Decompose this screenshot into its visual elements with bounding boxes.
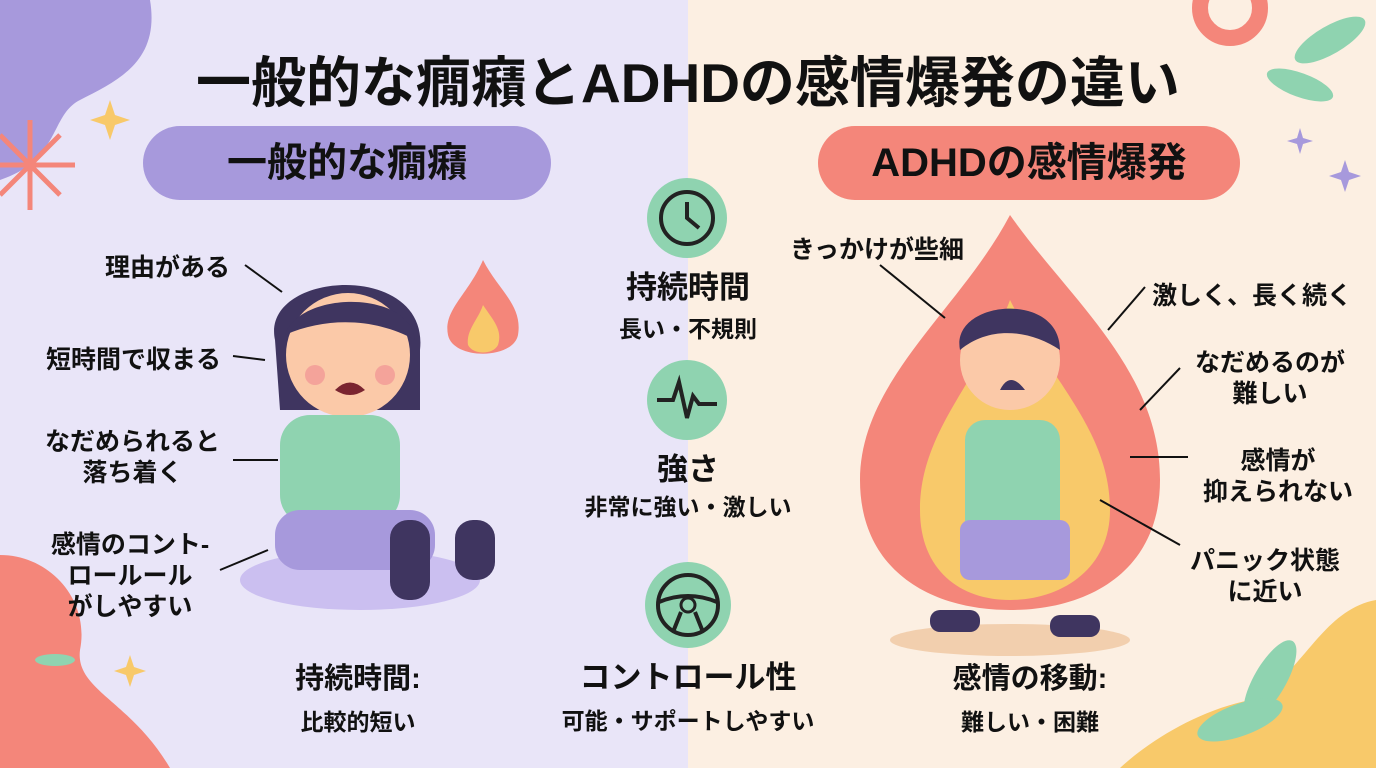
metric: controllability: コントロール性 <box>580 660 796 695</box>
text: 短時間で収まる <box>46 346 221 374</box>
text: 感情のコント- <box>51 531 209 559</box>
footer left: 比較的短い <box>300 709 416 735</box>
illustration: boy in flames <box>860 215 1160 656</box>
footer right <box>953 662 1107 735</box>
text: きっかけが些細 <box>790 236 964 264</box>
text: 長い・不規則 <box>619 316 757 342</box>
text: なだめるのが <box>1195 349 1345 377</box>
text: がしやすい <box>68 593 192 621</box>
footer right: 難しい・困難 <box>961 709 1099 735</box>
labels: general tantrum <box>45 254 230 621</box>
text: 落ち着く <box>82 459 182 487</box>
text: 抑えられない <box>1203 478 1353 506</box>
illustration: crying girl <box>240 285 495 610</box>
text: 非常に強い・激しい <box>584 494 792 520</box>
text: ロールール <box>67 562 192 590</box>
icon: pulse <box>647 360 727 440</box>
header pill: general tantrum <box>143 126 551 200</box>
text: 可能・サポートしやすい <box>562 708 814 734</box>
labels: ADHD outburst <box>649 236 1353 637</box>
icon: clock <box>647 178 727 258</box>
footer left <box>295 663 421 735</box>
footer left: 持続時間: <box>295 663 421 695</box>
title: 一般的な癇癪とADHDの感情爆発の違い <box>196 52 1180 114</box>
text: 理由がある <box>105 254 230 282</box>
header pill: ADHD outburst <box>818 126 1240 200</box>
text: 感情が <box>1240 447 1316 475</box>
text: 難しい <box>1232 380 1308 408</box>
text: なだめられると <box>45 428 220 456</box>
header pill: general tantrum: 一般的な癇癪 <box>227 141 467 185</box>
text: パニック状態 <box>1190 547 1340 575</box>
footer right: 感情の移動: <box>953 663 1107 695</box>
icon: small flame <box>447 260 519 354</box>
metric: intensity: 強さ <box>657 452 719 487</box>
header pill: ADHD outburst: ADHDの感情爆発 <box>871 141 1187 185</box>
icon: steering wheel <box>645 562 731 648</box>
text: 激しく、長く続く <box>1152 282 1352 310</box>
metric: duration: 持続時間 <box>626 270 750 305</box>
text: に近い <box>1227 578 1302 606</box>
